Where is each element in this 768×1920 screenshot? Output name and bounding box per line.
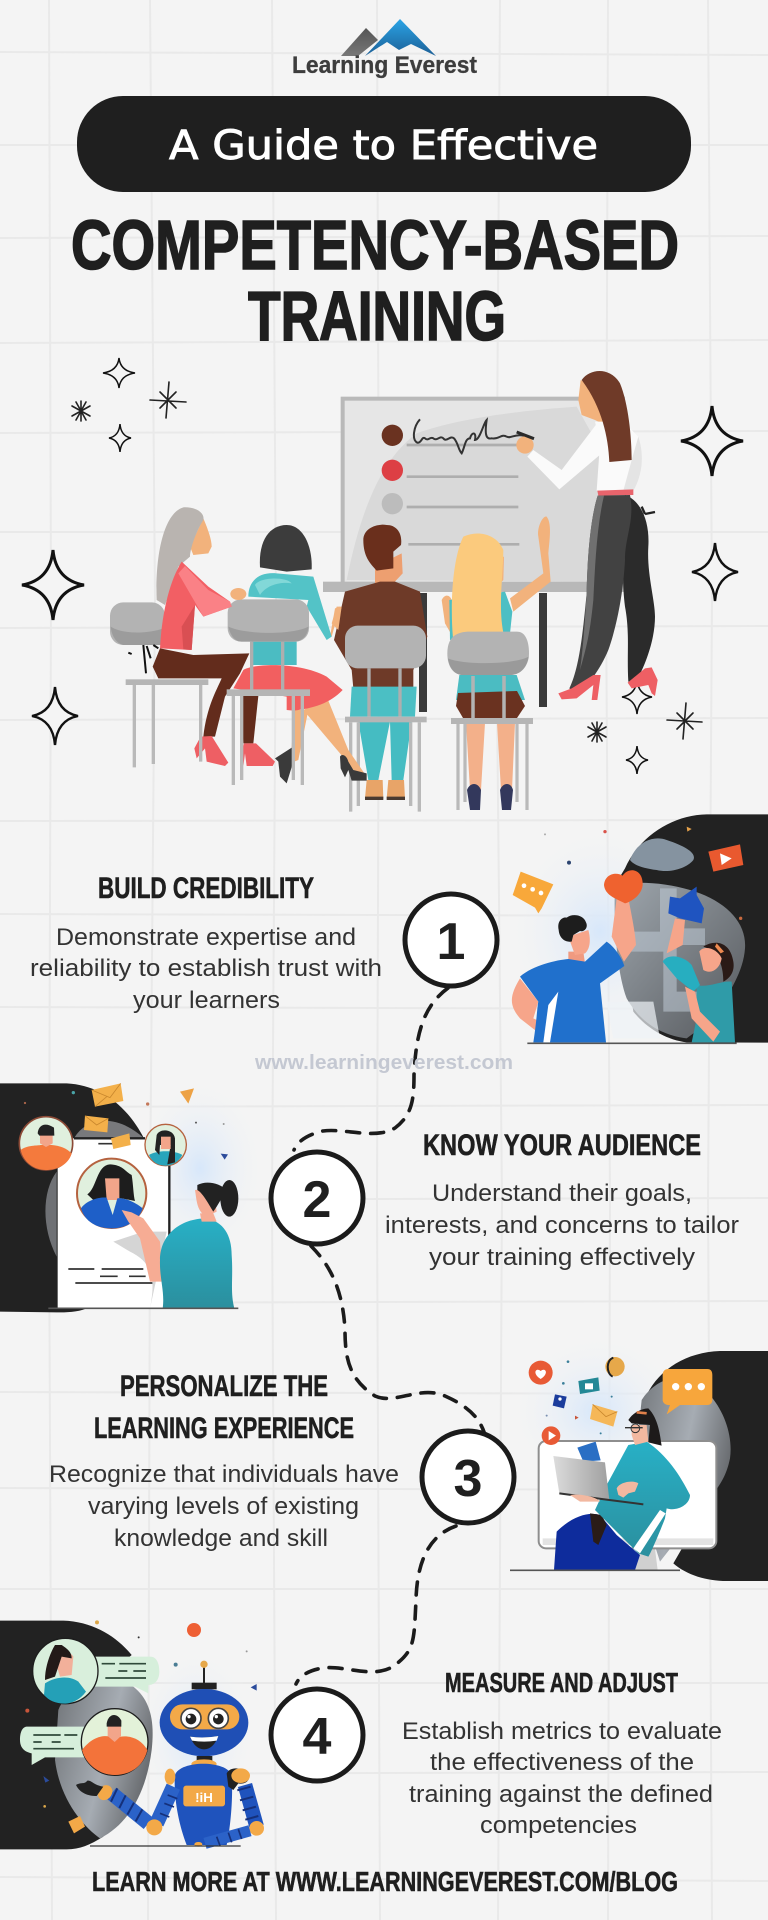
logo <box>292 19 477 79</box>
step 2: know your audience <box>0 1075 739 1312</box>
heading: MEASURE AND ADJUST <box>445 1667 678 1698</box>
description: training against the defined <box>409 1781 713 1808</box>
student: black bob in teal and coral <box>228 525 367 783</box>
logo wordmark: Learning Everest <box>292 52 477 79</box>
description: Demonstrate expertise and <box>56 924 356 951</box>
chat bubble bottom <box>20 1727 88 1765</box>
description: your learners <box>133 987 280 1014</box>
illustration: robot with chat avatars <box>0 1620 264 1849</box>
description: your training effectively <box>429 1244 695 1271</box>
number badge 3 <box>422 1431 514 1523</box>
avatar: woman small <box>145 1124 186 1166</box>
description: varying levels of existing <box>88 1493 359 1520</box>
decorative sparkles <box>22 358 743 774</box>
title <box>71 206 679 355</box>
number badge 4 <box>271 1689 363 1781</box>
number badge 2: 2 <box>303 1171 331 1229</box>
student: man in brown vest <box>332 525 427 812</box>
description <box>30 924 382 1014</box>
heading: KNOW YOUR AUDIENCE <box>423 1129 701 1162</box>
heading: BUILD CREDIBILITY <box>98 872 314 905</box>
illustration: woman with laptop at monitor <box>507 1332 768 1581</box>
description: Establish metrics to evaluate <box>402 1718 722 1745</box>
step 1: build credibility <box>30 814 768 1043</box>
heading: PERSONALIZE THE <box>120 1370 328 1403</box>
step 3: personalize the learning experience <box>49 1332 768 1581</box>
avatar: woman <box>33 1638 98 1704</box>
chat bubble top <box>93 1657 159 1693</box>
student: blonde raising hand <box>442 517 551 810</box>
number badge 3: 3 <box>454 1450 482 1508</box>
description: Understand their goals, <box>432 1180 692 1207</box>
teacher <box>516 371 658 700</box>
number badge 1 <box>405 894 497 986</box>
step 4: measure and adjust <box>0 1620 722 1849</box>
description <box>49 1461 399 1552</box>
board legs <box>419 593 547 712</box>
title banner: A Guide to Effective <box>169 123 598 169</box>
description: reliability to establish trust with <box>30 955 382 982</box>
title banner <box>77 96 691 192</box>
description: competencies <box>480 1812 637 1839</box>
avatar: man <box>19 1117 73 1170</box>
description: the effectiveness of the <box>430 1749 694 1776</box>
icon: mountains <box>341 19 436 56</box>
whiteboard <box>323 397 625 592</box>
avatar: man <box>81 1709 148 1775</box>
number badge 4: 4 <box>303 1708 332 1766</box>
connector dashed path <box>294 988 484 1684</box>
classroom illustration <box>110 371 658 812</box>
heading: LEARNING EXPERIENCE <box>94 1412 354 1445</box>
description: interests, and concerns to tailor <box>385 1212 739 1239</box>
student: grey hair in coral <box>110 507 310 785</box>
description: Recognize that individuals have <box>49 1461 399 1488</box>
person pointing <box>122 1180 238 1308</box>
avatar: woman large <box>77 1159 146 1228</box>
illustration: person selecting profiles on a board <box>0 1075 267 1312</box>
website watermark: www.learningeverest.com <box>254 1052 513 1074</box>
number badge 2 <box>271 1152 363 1244</box>
description: knowledge and skill <box>114 1525 328 1552</box>
illustration: robot with chat avatars: !iH <box>195 1790 213 1805</box>
title: TRAINING <box>248 277 506 355</box>
description <box>385 1180 739 1271</box>
number badge 1: 1 <box>437 913 465 971</box>
description <box>402 1718 722 1839</box>
heading <box>94 1370 354 1445</box>
illustration: people with heart and thumbs up <box>503 814 768 1043</box>
